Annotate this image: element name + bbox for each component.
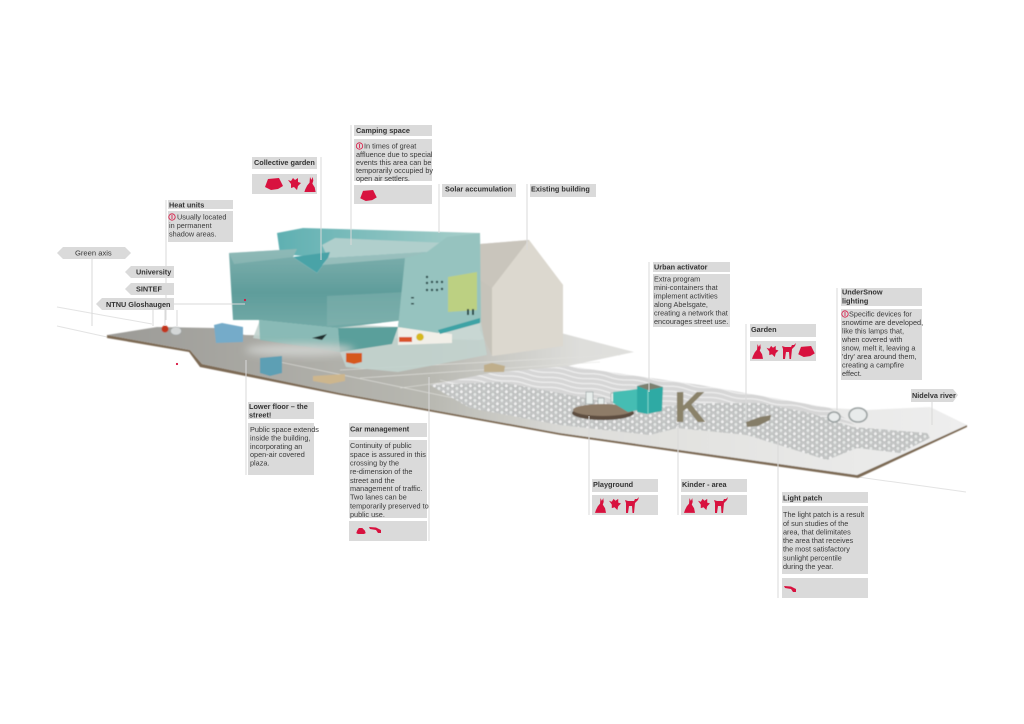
label: Nidelva river: Nidelva river (912, 391, 956, 400)
panel: car management: management of traffic. (350, 484, 422, 493)
panel: urban activator: mini-containers that (654, 283, 718, 292)
orange cylinder (346, 353, 362, 364)
panel: heat units: in permanent (169, 221, 212, 230)
panel: undersnow lighting: creating a campfire (842, 360, 904, 370)
river surface (430, 366, 855, 425)
glass base of teal building (253, 320, 487, 372)
panel: car management (349, 423, 429, 541)
wooden block left (313, 374, 345, 384)
panel: kinder area (681, 479, 747, 515)
panel: urban activator: creating a network that (654, 308, 728, 318)
wooden block right (484, 363, 505, 372)
label: NTNU Gloshaugen (96, 298, 174, 310)
glass lamp domes (828, 408, 867, 422)
panel: lower floor: plaza. (250, 458, 269, 468)
faint perspective axis lines (57, 307, 966, 492)
panel: existing building (530, 184, 596, 197)
building open ground floor (398, 327, 452, 345)
panel: lower floor: incorporating an (250, 442, 302, 451)
panel: light patch: The light patch is a result (783, 510, 864, 519)
panel: light patch: sunlight percentile (783, 554, 842, 562)
panel: car management: space is assured in this (350, 450, 426, 459)
icon: info (169, 214, 175, 220)
panel: solar accumulation (442, 184, 516, 197)
panel: lower floor: Lower floor – the (249, 402, 308, 411)
panel: heat units: Usually located (177, 212, 226, 222)
panel: camping space (354, 125, 433, 204)
plaza street lines (270, 355, 620, 420)
teal containers (613, 383, 663, 414)
panel: undersnow lighting: snowtime are developed, (842, 318, 923, 327)
panel: camping space: affluence due to special (356, 150, 433, 159)
glass pebble river bed (430, 382, 930, 460)
panel: existing building: Existing building (531, 184, 590, 194)
panel: garden: Garden (751, 325, 777, 334)
panel: light patch (782, 492, 868, 598)
panel: camping space: events this area can be (356, 158, 431, 167)
panel: heat units: Heat units (169, 200, 204, 210)
panel: heat units (168, 200, 233, 242)
dark objects under building (312, 334, 327, 340)
panel: lower floor (248, 402, 319, 475)
panel: car management: street and the (350, 476, 395, 485)
light fog on plate under building (245, 344, 355, 356)
site model photograph (107, 228, 967, 478)
panel: undersnow lighting: UnderSnow (842, 288, 883, 296)
teal building front mass (229, 249, 427, 328)
base plate (107, 325, 967, 475)
label: SINTEF (125, 283, 174, 295)
panel: collective garden (252, 157, 317, 194)
leader lines (92, 125, 932, 598)
panel: camping space: In times of great (364, 142, 416, 150)
panel: car management: Car management (350, 424, 410, 434)
label: green axis: Green axis (75, 248, 112, 258)
existing building (480, 240, 563, 356)
panel: undersnow lighting: like this lamps that, (842, 326, 904, 336)
panel: urban activator: implement activities (654, 292, 718, 300)
icon: info (356, 143, 363, 149)
panel: urban activator: encourages street use. (654, 317, 728, 326)
panel: undersnow lighting: 'dry' area around them, (842, 352, 917, 361)
panel: urban activator (653, 262, 730, 327)
panel: undersnow lighting: when covered with (841, 335, 902, 344)
panel: lower floor: Public space extends (250, 425, 319, 434)
panel: heat units: shadow areas. (169, 230, 216, 238)
panel: camping space: temporarily occupied by (356, 166, 433, 175)
icon: info (842, 311, 848, 317)
panel: undersnow lighting: Specific devices for (849, 310, 912, 318)
label: SINTEF: SINTEF (136, 284, 162, 294)
facade panels (229, 249, 427, 326)
panel: car management: public use. (350, 510, 385, 519)
panel: car management: crossing by the (350, 458, 399, 468)
small wooden bench (746, 415, 771, 427)
red markers (176, 299, 246, 365)
panel: camping space: open air settlers. (356, 174, 410, 183)
panel: garden (750, 324, 816, 361)
panel: light patch: during the year. (783, 562, 833, 571)
teal building lower glass (259, 320, 340, 352)
panel: playground: Playground (593, 480, 633, 489)
red heat unit and glass lamp (162, 326, 182, 335)
panel: collective garden: Collective garden (254, 158, 315, 167)
right facade (398, 233, 481, 334)
panel: undersnow lighting: effect. (842, 369, 862, 378)
panel: light patch: the area that receives (783, 536, 854, 545)
K sculpture: K (674, 383, 706, 432)
panel: camping space: Camping space (356, 126, 410, 135)
panel: car management: Continuity of public (350, 441, 412, 450)
panel: car management: Two lanes can be (350, 492, 407, 502)
teal building rear volume (277, 228, 481, 332)
blue glass box front (260, 356, 282, 376)
panel: undersnow lighting (841, 288, 923, 380)
label: NTNU Gloshaugen: NTNU Gloshaugen (106, 300, 170, 309)
label: university (125, 266, 174, 278)
panel: playground (592, 479, 658, 515)
teal building roof terrace (322, 238, 447, 258)
blue glass box rear (214, 323, 243, 343)
panel: light patch: of sun studies of the (783, 519, 848, 528)
panel: car management: re-dimension of the (350, 467, 412, 476)
panel: car management: temporarily preserved to (350, 502, 429, 510)
panel: lower floor: inside the building, (250, 434, 310, 442)
label: Nidelva river (911, 389, 958, 402)
panel: solar accumulation: Solar accumulation (445, 184, 512, 194)
panel: light patch: Light patch (783, 494, 822, 502)
panel: urban activator: along Abelsgate, (654, 300, 708, 309)
playground disc (572, 392, 634, 420)
panel: kinder area: Kinder - area (682, 480, 728, 489)
base plate edge (107, 335, 967, 478)
panel: light patch: area, that delimitates (783, 528, 851, 536)
panel: undersnow lighting: snow, melt it, leaving a (842, 344, 916, 352)
panel: lower floor: street! (249, 410, 271, 420)
panel: urban activator: Urban activator (654, 262, 708, 272)
label: green axis (57, 247, 131, 259)
panel: undersnow lighting: lighting (842, 296, 868, 306)
panel: lower floor: open-air covered (250, 450, 305, 459)
panel: light patch: the most satisfactory (783, 544, 850, 554)
label: university: University (136, 268, 172, 276)
panel: urban activator: Extra program (654, 274, 700, 284)
